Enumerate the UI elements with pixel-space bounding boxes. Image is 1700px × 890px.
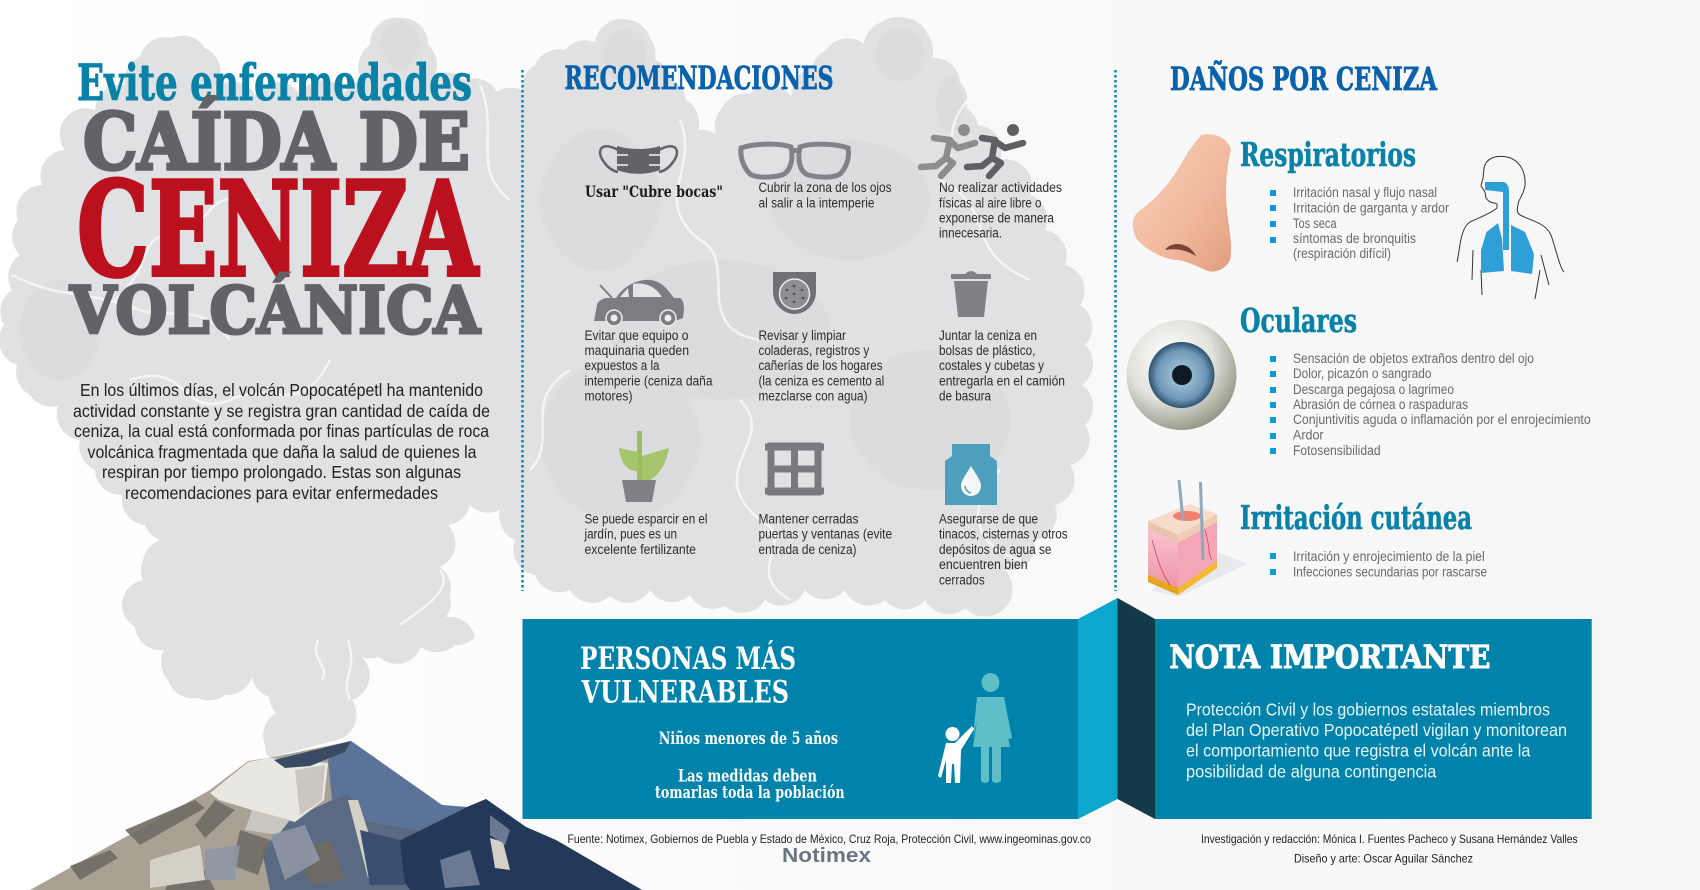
list: respiratorios: (respiración difícil) — [1293, 246, 1391, 261]
text: no realizar — [939, 180, 1062, 241]
text: tinacos — [939, 512, 1068, 587]
icon: skin cross-section — [1148, 480, 1247, 597]
ash cloud illustration — [0, 17, 1093, 758]
text: esparcir jardin: excelente fertilizante — [584, 542, 696, 557]
list: respiratorios: Tos seca — [1293, 216, 1337, 231]
intro paragraph: ceniza, la cual está conformada por finas partículas de roca — [74, 421, 489, 441]
text: evitar equipo: expuestos a la — [584, 358, 660, 373]
text: nota body: el comportamiento que registra el volcán ante la — [1186, 741, 1531, 761]
text: tinacos: encuentren bien — [939, 557, 1028, 572]
text: esparcir jardin: jardín, pues es un — [584, 527, 677, 542]
heading: personas mas vulnerables: VULNERABLES — [581, 675, 789, 711]
dotted divider right — [1114, 70, 1117, 591]
text: tinacos: depósitos de agua se — [939, 542, 1052, 557]
volcano illustration — [30, 741, 642, 890]
list: oculares: Abrasión de córnea o raspaduras — [1293, 397, 1468, 412]
list: oculares: Dolor, picazón o sangrado — [1293, 366, 1432, 381]
heading: CAÍDA DE: CAÍDA DE — [83, 96, 470, 188]
text: revisar coladeras: Revisar y limpiar — [758, 328, 846, 343]
text: cerrar puertas: entrada de ceniza) — [758, 542, 856, 557]
text: esparcir jardin — [584, 512, 708, 557]
text: evitar equipo: motores) — [584, 388, 632, 404]
list: oculares: Sensación de objetos extraños dentro del ojo — [1293, 351, 1534, 366]
heading: daños por ceniza: DAÑOS POR CENIZA — [1170, 60, 1438, 98]
text: no realizar: exponerse de manera — [939, 210, 1054, 226]
text: fuente: Fuente: Notimex, Gobiernos de Puebla y Estado de México, Cruz Roja, Protección Civil, www.ingeominas.gov.co — [568, 832, 1091, 846]
icon: lungs and torso — [1457, 156, 1564, 299]
icon: window — [765, 446, 824, 492]
icon: runners — [921, 124, 1023, 176]
heading: respiratorios: Respiratorios — [1240, 135, 1416, 174]
text: cubrir ojos: al salir a la intemperie — [758, 196, 874, 211]
text: juntar ceniza — [939, 328, 1065, 404]
text: no realizar: innecesaria. — [939, 226, 1002, 241]
text: cerrar puertas: Mantener cerradas — [758, 512, 859, 526]
panel: personas mas vulnerables — [522, 619, 1078, 819]
list: respiratorios: síntomas de bronquitis — [1293, 231, 1416, 246]
list: respiratorios: Irritación nasal y flujo nasal — [1293, 185, 1437, 200]
text: no realizar: físicas al aire libre o — [939, 196, 1042, 211]
text: cerrar puertas — [758, 512, 892, 557]
icon: glasses — [741, 144, 849, 177]
text: usar cubre bocas: Usar "Cubre bocas" — [585, 182, 723, 201]
text: esparcir jardin: Se puede esparcir en el — [584, 512, 708, 526]
list: respiratorios: Irritación de garganta y ardor — [1293, 200, 1449, 216]
text: juntar ceniza: costales y cubetas y — [939, 358, 1044, 373]
text: diseno: Diseño y arte: Oscar Aguilar Sánchez — [1294, 852, 1473, 866]
list: respiratorios — [1270, 185, 1449, 261]
heading: oculares: Oculares — [1240, 301, 1357, 340]
icon: eyeball — [1126, 320, 1236, 430]
snow cap — [210, 758, 328, 822]
text: revisar coladeras — [758, 328, 884, 404]
text: investigacion: Investigación y redacción: Mónica I. Fuentes Pacheco y Susana Hernández Valles — [1201, 832, 1578, 846]
heading: Evite enfermedades: Evite enfermedades — [77, 53, 472, 112]
text: no realizar: No realizar actividades — [939, 180, 1062, 195]
icon: mother and child — [938, 673, 1012, 783]
blue shaded slope — [328, 741, 467, 830]
list: oculares: Fotosensibilidad — [1293, 443, 1381, 458]
text: tinacos: Asegurarse de que — [939, 512, 1038, 526]
text: revisar coladeras: (la ceniza es cemento al — [758, 374, 884, 389]
rocky patches — [70, 800, 345, 890]
text: nota body: Protección Civil y los gobiernos estatales miembros — [1186, 700, 1550, 720]
heading: personas mas vulnerables — [580, 639, 796, 711]
text: juntar ceniza: entregarla en el camión — [939, 374, 1065, 389]
fold: light blue — [1078, 598, 1118, 819]
text: las medidas: Las medidas deben — [678, 767, 817, 787]
intro paragraph: respiran por tiempo prolongado. Estas son algunas — [102, 462, 461, 482]
list: irritacion: Irritación y enrojecimiento de la piel — [1293, 549, 1485, 564]
heading: personas mas vulnerables: PERSONAS MÁS — [580, 639, 796, 677]
text: juntar ceniza: Juntar la ceniza en — [939, 328, 1037, 343]
heading: recomendaciones: RECOMENDACIONES — [564, 59, 834, 97]
heading: CENIZA: CENIZA — [77, 153, 479, 306]
text: ninos menores: Niños menores de 5 años — [659, 729, 838, 749]
text: revisar coladeras: mezclarse con agua) — [758, 388, 868, 404]
list: irritacion: Infecciones secundarias por rascarse — [1293, 564, 1487, 579]
text: juntar ceniza: de basura — [939, 388, 991, 404]
icon: water tank — [945, 444, 997, 505]
panel: nota importante — [1155, 619, 1592, 819]
intro paragraph: volcánica fragmentada que daña la salud de quienes la — [88, 442, 477, 462]
list: oculares: Descarga pegajosa o lagrimeo — [1293, 382, 1454, 397]
text: las medidas — [655, 767, 845, 803]
intro paragraph — [73, 380, 490, 503]
icon: car — [594, 280, 684, 326]
list: oculares: Ardor — [1293, 428, 1324, 443]
icon: face mask — [600, 146, 677, 174]
dotted divider left — [521, 70, 524, 591]
heading: VOLCÁNICA: VOLCÁNICA — [69, 272, 481, 349]
text: evitar equipo: Evitar que equipo o — [584, 328, 688, 343]
fold: dark — [1118, 598, 1155, 819]
crater rim — [274, 741, 351, 768]
icon: plant — [619, 431, 669, 502]
dark lower slope — [380, 799, 642, 890]
intro paragraph: En los últimos días, el volcán Popocatépetl ha mantenido — [80, 380, 483, 400]
text: cerrar puertas: puertas y ventanas (evite — [758, 527, 892, 542]
list: oculares: Conjuntivitis aguda o inflamación por el enrojecimiento — [1293, 412, 1591, 427]
text: revisar coladeras: coladeras, registros y — [758, 343, 869, 358]
text: cubrir ojos: Cubrir la zona de los ojos — [758, 180, 892, 195]
text: evitar equipo: intemperie (ceniza daña — [584, 374, 713, 389]
intro paragraph: actividad constante y se registra gran cantidad de caída de — [73, 401, 490, 421]
text: revisar coladeras: cañerías de los hogares — [758, 358, 883, 373]
text: nota body: posibilidad de alguna contingencia — [1186, 761, 1437, 781]
list: irritacion — [1270, 549, 1487, 579]
text: cubrir ojos — [758, 180, 892, 211]
text: juntar ceniza: bolsas de plástico, — [939, 343, 1035, 358]
icon: drain shield — [773, 272, 816, 314]
list: oculares — [1270, 351, 1591, 458]
text: evitar equipo: maquinaria queden — [584, 343, 689, 358]
text: nota body — [1186, 700, 1567, 781]
central mixed slope — [262, 793, 421, 890]
icon: trash can — [951, 271, 991, 317]
intro paragraph: recomendaciones para evitar enfermedades — [125, 483, 438, 503]
text: tinacos: tinacos, cisternas y otros — [939, 527, 1068, 542]
text: nota body: del Plan Operativo Popocatépetl vigilan y monitorean — [1186, 720, 1567, 740]
text: las medidas: tomarlas toda la población — [655, 783, 845, 803]
text: tinacos: cerrados — [939, 572, 985, 587]
logo: notimex: Notimex — [782, 845, 871, 867]
heading: nota importante: NOTA IMPORTANTE — [1169, 638, 1490, 676]
heading: irritacion cutanea: Irritación cutánea — [1240, 498, 1472, 537]
icon: nose — [1133, 134, 1231, 272]
text: evitar equipo — [584, 328, 713, 404]
